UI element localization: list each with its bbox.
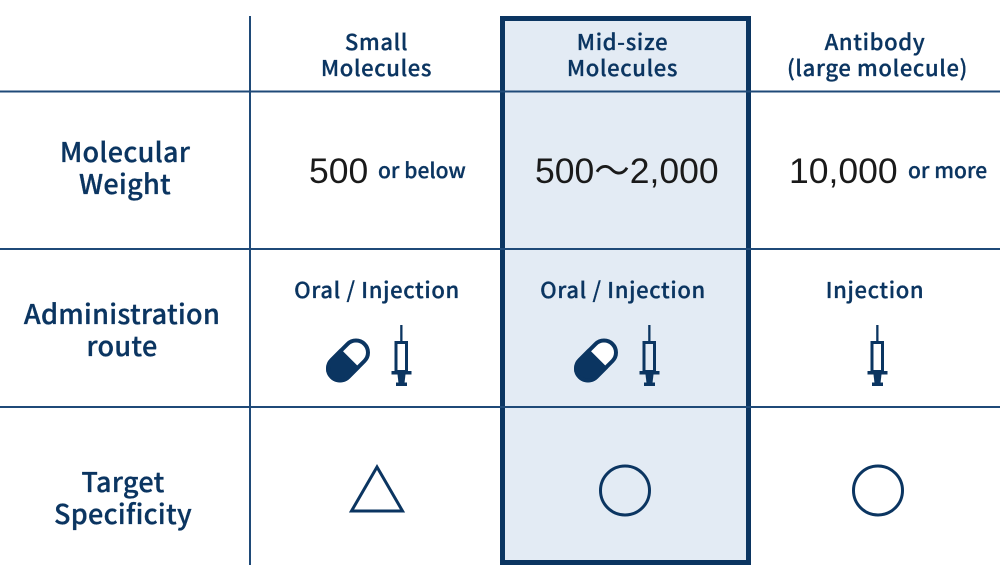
row label: Target Specificity: Specificity [54,493,192,532]
heading: Mid-size Molecules: Mid-size [577,25,668,57]
symbol: circle antibody [854,466,902,515]
icon: capsule mid-size [571,336,621,385]
icon: syringe mid-size [640,325,660,386]
symbol: circle mid-size [600,466,650,515]
heading: Small Molecules: Small [345,25,408,57]
value: antibody weight: 10,000 [789,151,898,191]
icon: syringe small molecules [392,325,412,386]
route: small molecules: Oral / Injection [294,273,460,305]
value: mid-size molecule weight: 500〜2,000 [535,151,719,191]
heading: Mid-size Molecules: Molecules [567,51,678,83]
value: small molecule weight [309,151,466,191]
icon: syringe antibody [868,325,888,386]
value: antibody weight: or more [908,155,987,185]
row label: Molecular Weight: Molecular [60,131,191,170]
panel: highlighted mid-size column [502,18,748,562]
heading: Small Molecules: Molecules [321,51,432,83]
value: antibody weight [789,151,987,191]
row label: Molecular Weight: Weight [79,163,171,202]
row label: Administration route: Administration [24,293,220,332]
value: small molecule weight: or below [378,155,466,185]
route: mid-size molecules: Oral / Injection [540,273,706,305]
route: antibody: Injection [826,273,924,305]
row label: Target Specificity: Target [81,461,165,500]
symbol: triangle small molecules [352,467,402,511]
value: small molecule weight: 500 [309,151,368,191]
heading: Antibody (large molecule): (large molecule) [787,51,968,83]
heading: Antibody (large molecule): Antibody [825,25,925,57]
icon: capsule small molecules [323,336,373,385]
row label: Administration route: route [86,325,158,364]
